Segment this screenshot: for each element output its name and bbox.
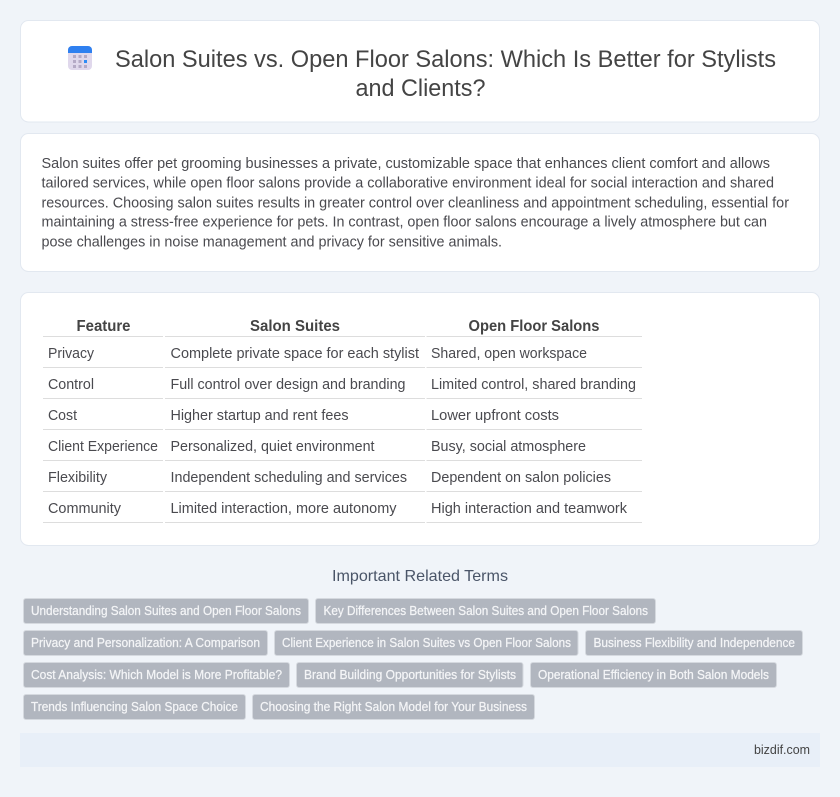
row: cost: Lower upfront costs [431, 408, 559, 424]
row: community [48, 501, 628, 517]
tag [24, 598, 308, 624]
title: Salon Suites vs. Open Floor Salons: Which Is Better for Stylists [115, 46, 776, 73]
panel: summary [20, 134, 820, 272]
row: flexibility: Flexibility [48, 470, 108, 486]
tag list [24, 598, 802, 720]
row: client experience: Busy, social atmosphere [431, 439, 586, 455]
row: community: Limited interaction, more autonomy [170, 501, 397, 517]
text block: summary paragraph: resources. Choosing salon suites results in greater control over cleanliness and appointment scheduling, essential for [42, 196, 789, 212]
row: privacy: Privacy [48, 346, 95, 362]
table header row: Feature [76, 318, 131, 335]
row: client experience [48, 439, 586, 455]
table header row: Salon Suites [250, 318, 340, 335]
table header row: Open Floor Salons [468, 318, 600, 335]
tag [296, 662, 523, 688]
tag: Privacy and Personalization: A Comparison [31, 636, 260, 650]
row: cost: Higher startup and rent fees [170, 408, 348, 424]
row: privacy [48, 346, 587, 362]
tag [274, 630, 578, 656]
row: control: Full control over design and branding [170, 377, 406, 393]
row: cost: Cost [48, 408, 77, 424]
row: control: Limited control, shared branding [431, 377, 636, 393]
row: flexibility: Dependent on salon policies [431, 470, 611, 486]
tag [24, 662, 290, 688]
row: privacy: Complete private space for each stylist [170, 346, 419, 362]
tag [24, 694, 246, 720]
tag: Trends Influencing Salon Space Choice [31, 700, 238, 714]
tag [530, 662, 776, 688]
row: privacy: Shared, open workspace [431, 346, 587, 362]
row: flexibility: Independent scheduling and services [170, 470, 407, 486]
tag: Client Experience in Salon Suites vs Open Floor Salons [282, 636, 571, 650]
tag: Choosing the Right Salon Model for Your Business [260, 700, 527, 714]
text block: summary paragraph: tailored services, while open floor salons provide a collaborative environment ideal for social interaction and shared [42, 176, 774, 192]
row: client experience: Client Experience [48, 439, 158, 455]
icon: calendar [68, 46, 92, 70]
panel: comparison table [20, 292, 820, 546]
tag [252, 694, 534, 720]
title [115, 46, 776, 102]
tag [24, 630, 268, 656]
tag: Understanding Salon Suites and Open Floor Salons [31, 604, 301, 618]
title: and Clients? [356, 75, 486, 102]
row: community: Community [48, 501, 122, 517]
row: control: Control [48, 377, 94, 393]
row: control [48, 377, 636, 393]
row: flexibility [48, 470, 611, 486]
footer [20, 733, 820, 767]
panel: header [20, 20, 820, 122]
heading: important related terms: Important Related Terms [332, 568, 508, 585]
tag: Cost Analysis: Which Model is More Profitable? [31, 668, 282, 682]
tag: Business Flexibility and Independence [594, 636, 795, 650]
tag [316, 598, 656, 624]
text block: summary paragraph [42, 156, 789, 251]
row: cost [48, 408, 559, 424]
tag: Brand Building Opportunities for Stylists [304, 668, 516, 682]
tag: Key Differences Between Salon Suites and Open Floor Salons [324, 604, 648, 618]
table header row [76, 318, 600, 335]
tag: Operational Efficiency in Both Salon Models [538, 668, 769, 682]
footer: bizdif.com [754, 743, 810, 757]
tag [586, 630, 802, 656]
text block: summary paragraph: Salon suites offer pet grooming businesses a private, customizable space that enhances client comfort and allows [42, 156, 770, 172]
text block: summary paragraph: pose challenges in noise management and privacy for sensitive animals. [42, 235, 502, 251]
row: community: High interaction and teamwork [431, 501, 628, 517]
row: client experience: Personalized, quiet environment [170, 439, 374, 455]
text block: summary paragraph: maintaining a stress-free experience for pets. In contrast, open floor salons encourage a lively atmosphere but can [42, 215, 767, 231]
